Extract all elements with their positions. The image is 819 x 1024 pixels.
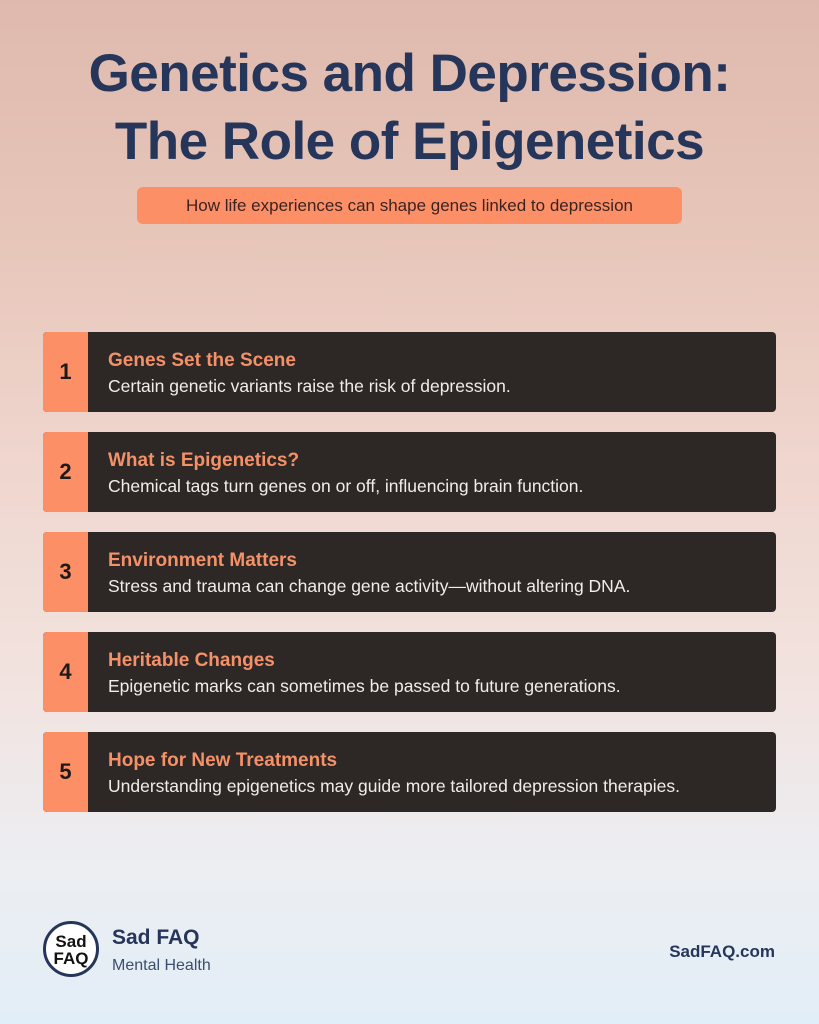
title: Genetics and Depression: xyxy=(89,44,730,103)
brand text: Sad FAQ xyxy=(112,926,200,949)
card 3: 3 xyxy=(59,559,72,584)
brand text xyxy=(112,926,211,974)
card 3 xyxy=(43,532,776,612)
icon: logo xyxy=(43,921,99,977)
card 3: Stress and trauma can change gene activity—without altering DNA. xyxy=(108,576,630,596)
subtitle pill xyxy=(137,187,682,224)
brand text: Mental Health xyxy=(112,957,211,974)
title xyxy=(89,44,730,171)
card 2: What is Epigenetics? xyxy=(108,450,299,471)
subtitle pill: How life experiences can shape genes linked to depression xyxy=(186,196,633,215)
card 2: Chemical tags turn genes on or off, influencing brain function. xyxy=(108,476,583,496)
card 5: 5 xyxy=(59,759,72,784)
card 5 xyxy=(43,732,776,812)
card 3: Environment Matters xyxy=(108,550,297,571)
title: The Role of Epigenetics xyxy=(115,112,704,171)
card 4: 4 xyxy=(59,659,72,684)
card 1 xyxy=(43,332,776,412)
card 5: Understanding epigenetics may guide more tailored depression therapies. xyxy=(108,776,680,796)
card 2 xyxy=(43,432,776,512)
card 1: Certain genetic variants raise the risk of depression. xyxy=(108,376,511,396)
website: SadFAQ.com xyxy=(669,942,775,961)
card 4: Epigenetic marks can sometimes be passed to future generations. xyxy=(108,676,621,696)
icon: logo: Sad xyxy=(55,932,87,951)
card 4 xyxy=(43,632,776,712)
card 4: Heritable Changes xyxy=(108,650,275,671)
card 2: 2 xyxy=(59,459,72,484)
card 1: 1 xyxy=(59,359,72,384)
icon: logo: FAQ xyxy=(54,949,88,968)
card 1: Genes Set the Scene xyxy=(108,350,296,371)
card 5: Hope for New Treatments xyxy=(108,750,337,771)
